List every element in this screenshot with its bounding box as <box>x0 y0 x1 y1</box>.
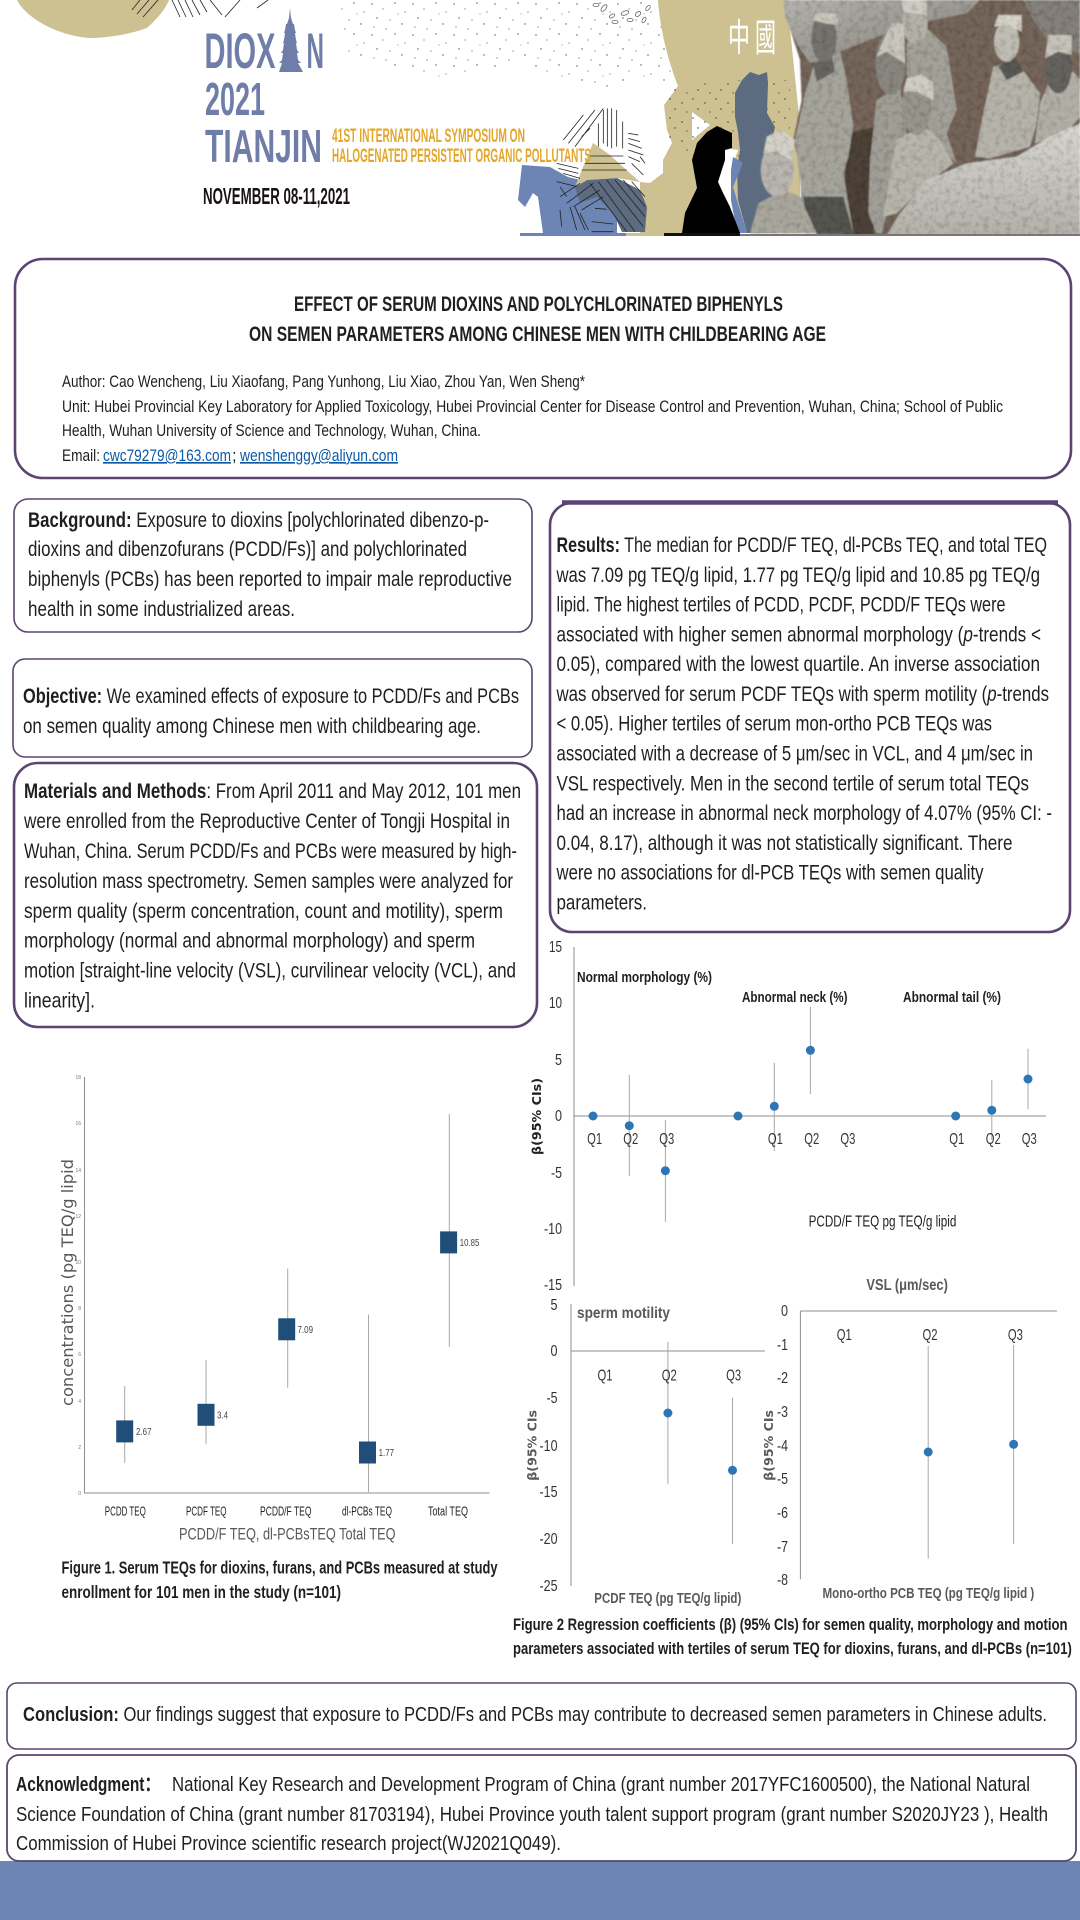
series headings: Abnormal tail (%) <box>903 989 1001 1006</box>
category labels <box>105 1504 468 1518</box>
blue silhouette strip <box>731 157 747 233</box>
y axis title: β(95% CIs) <box>530 1078 544 1155</box>
panel: materials and methods: sperm quality (sperm concentration, count and motility), sperm <box>24 900 503 923</box>
header banner: N <box>306 23 324 79</box>
y ticks <box>540 1297 558 1595</box>
title: EFFECT OF SERUM DIOXINS AND POLYCHLORINATED BIPHENYLS <box>294 293 783 316</box>
value labels: 7.09 <box>298 1325 313 1336</box>
whiskers <box>629 1007 1028 1222</box>
foreground rock <box>887 123 1080 235</box>
panel: title and authors <box>15 259 1071 478</box>
panel: materials and methods: motion [straight-line velocity (VSL), curvilinear velocity (VCL), and <box>24 960 516 982</box>
date: NOVEMBER 08-11,2021 <box>203 183 350 209</box>
y axis ticks: 12 <box>75 1214 81 1220</box>
icon: pagoda <box>279 8 303 72</box>
series headings: Normal morphology (%) <box>577 969 712 986</box>
whiskers <box>668 1342 732 1544</box>
icon: horse with hatch <box>518 108 647 233</box>
panel: background: health in some industrialized areas. <box>28 598 295 621</box>
panel: materials and methods: morphology (normal and abnormal morphology) and sperm <box>24 930 475 952</box>
photo: terracotta warriors <box>750 0 1080 235</box>
y ticks: -5 <box>777 1471 788 1488</box>
y ticks: -15 <box>540 1484 558 1501</box>
points <box>924 1440 1018 1456</box>
y ticks: 15 <box>549 939 562 956</box>
value labels <box>136 1238 480 1459</box>
panel: results: parameters. <box>556 892 647 914</box>
y axis title: concentrations (pg TEQ/g lipid <box>58 1159 77 1406</box>
y ticks: -10 <box>544 1221 562 1238</box>
whiskers <box>928 1345 1014 1559</box>
y axis ticks: 6 <box>78 1352 81 1358</box>
panel: materials and methods: resolution mass spectrometry. Semen samples were analyzed for <box>24 870 513 893</box>
y ticks: 0 <box>550 1343 558 1360</box>
y ticks <box>544 939 562 1294</box>
beige backdrop shape <box>640 0 800 233</box>
tertile labels: Q2 <box>986 1131 1001 1148</box>
chart: figure 1 serum TEQs <box>58 1075 490 1543</box>
top left hatch marks <box>132 0 268 17</box>
y ticks: -4 <box>777 1438 788 1455</box>
panel: materials and methods: Materials and Methods: From April 2011 and May 2012, 101 men <box>24 780 521 803</box>
decorative beige blob top left <box>17 0 169 38</box>
panel: background: dioxins and dibenzofurans (PCDD/Fs)] and polychlorinated <box>28 538 467 561</box>
authors and affiliation: Email: <box>62 447 100 465</box>
series headings <box>577 969 1001 1006</box>
tertile labels: Q1 <box>837 1327 852 1344</box>
points <box>663 1408 737 1475</box>
tertile labels: Q2 <box>623 1131 638 1148</box>
panel: conclusion <box>7 1683 1076 1749</box>
small outlined ovals <box>593 3 651 24</box>
symposium subtitle: 41ST INTERNATIONAL SYMPOSIUM ON <box>332 125 525 147</box>
panel: background <box>14 499 532 632</box>
y axis ticks: 2 <box>78 1445 81 1451</box>
y ticks: -3 <box>777 1404 788 1421</box>
value labels: 2.67 <box>136 1427 152 1438</box>
y axis ticks: 18 <box>75 1075 81 1081</box>
authors and affiliation: wenshenggy@aliyun.com <box>239 447 398 465</box>
chart: VSL regression <box>762 1277 1057 1602</box>
category labels: PCDD/F TEQ <box>260 1504 312 1518</box>
figure 1 caption <box>62 1558 498 1602</box>
panel: background: Background: Exposure to dioxins [polychlorinated dibenzo-p- <box>28 509 489 532</box>
y ticks: 0 <box>781 1303 788 1320</box>
stippled dot field <box>337 0 676 90</box>
panel: acknowledgment: Acknowledgment： <box>16 1773 160 1796</box>
city TIANJIN: TIANJIN <box>205 120 322 172</box>
y axis ticks: 16 <box>75 1121 81 1127</box>
y ticks: -7 <box>777 1539 788 1556</box>
panel: results: was observed for serum PCDF TEQs with sperm motility (p-trends <box>556 683 1049 706</box>
title: ON SEMEN PARAMETERS AMONG CHINESE MEN WITH CHILDBEARING AGE <box>249 323 826 346</box>
stippling on beige <box>668 80 790 160</box>
warrior behind <box>907 28 957 163</box>
black silhouette <box>682 126 740 233</box>
header banner <box>17 0 1080 236</box>
y ticks: -8 <box>777 1572 788 1589</box>
y axis ticks: 8 <box>78 1306 81 1312</box>
panel: acknowledgment <box>7 1755 1076 1861</box>
y axis title: β(95% CIs <box>526 1410 540 1481</box>
year 2021: 2021 <box>205 73 265 125</box>
authors and affiliation: Author: Cao Wencheng, Liu Xiaofang, Pang Yunhong, Liu Xiao, Zhou Yan, Wen Sheng* <box>62 373 585 391</box>
panel: background: biphenyls (PCBs) has been reported to impair male reproductive <box>28 568 512 591</box>
panel: results: were no associations for dl-PCB TEQs with semen quality <box>556 862 984 885</box>
bottom edge strip of banner <box>520 233 1080 236</box>
tertile labels <box>598 1368 741 1385</box>
y ticks: -25 <box>540 1578 558 1595</box>
footer band <box>0 1861 1080 1920</box>
tertile labels: Q3 <box>1022 1131 1037 1148</box>
category labels: Total TEQ <box>428 1504 468 1518</box>
tertile labels: Q2 <box>662 1368 677 1385</box>
y ticks: -5 <box>551 1165 562 1182</box>
y ticks: -1 <box>777 1337 788 1354</box>
y axis ticks <box>75 1075 81 1497</box>
warrior right <box>975 62 1040 158</box>
y ticks: -5 <box>546 1390 558 1407</box>
conference name DIOXIN: DIOX <box>204 23 276 79</box>
y ticks <box>777 1303 788 1589</box>
panel: materials and methods <box>14 763 537 1027</box>
tertile labels: Q2 <box>922 1327 938 1344</box>
authors and affiliation <box>62 373 1003 465</box>
y axis ticks: 0 <box>78 1491 81 1497</box>
category labels: PCDF TEQ <box>186 1504 227 1518</box>
y axis title: β(95% CIs <box>762 1410 776 1481</box>
x axis title: PCDD/F TEQ pg TEQ/g lipid <box>809 1214 956 1231</box>
panel: materials and methods: linearity]. <box>24 990 95 1012</box>
value labels: 10.85 <box>460 1238 480 1249</box>
chart heading: VSL (μm/sec) <box>866 1277 948 1294</box>
authors and affiliation: cwc79279@163.com <box>103 447 231 465</box>
panel: materials and methods: were enrolled from the Reproductive Center of Tongji Hospital in <box>23 810 510 833</box>
tertile labels: Q3 <box>1008 1327 1023 1344</box>
y ticks: -10 <box>540 1438 558 1455</box>
x axis title: Mono-ortho PCB TEQ (pg TEQ/g lipid ) <box>822 1586 1034 1602</box>
tertile labels: Q3 <box>726 1368 741 1385</box>
tertile labels <box>587 1131 1037 1148</box>
category labels: PCDD TEQ <box>105 1504 146 1518</box>
y axis ticks: 4 <box>78 1399 81 1405</box>
panel: results <box>550 502 1070 932</box>
figure 1 caption: Figure 1. Serum TEQs for dioxins, furans, and PCBs measured at study <box>62 1558 498 1578</box>
y ticks: 5 <box>555 1052 562 1069</box>
panel: results: associated with higher semen abnormal morphology (p-trends < <box>556 623 1041 646</box>
points <box>588 1046 1032 1175</box>
symposium subtitle <box>332 125 591 167</box>
tertile labels: Q1 <box>598 1368 613 1385</box>
chart heading: sperm motility <box>577 1305 670 1322</box>
y axis ticks: 10 <box>75 1260 81 1266</box>
x axis title: PCDD/F TEQ, dl-PCBsTEQ Total TEQ <box>179 1524 396 1543</box>
y ticks: -15 <box>544 1277 562 1294</box>
symposium subtitle: HALOGENATED PERSISTENT ORGANIC POLLUTANTS <box>332 145 591 167</box>
chart: morphology regression <box>530 939 1046 1294</box>
markers <box>116 1231 457 1464</box>
warrior left standing <box>795 52 853 233</box>
category labels: dl-PCBs TEQ <box>342 1504 392 1518</box>
chinese seal characters: 國 <box>755 18 776 60</box>
tertile labels: Q3 <box>840 1131 855 1148</box>
chinese seal characters: 中 <box>728 18 750 60</box>
whiskers <box>125 1114 449 1492</box>
title <box>249 293 826 346</box>
x axis title: PCDF TEQ (pg TEQ/g lipid) <box>594 1591 741 1607</box>
panel: objective: on semen quality among Chinese men with childbearing age. <box>23 715 481 738</box>
chart: sperm motility regression <box>526 1297 765 1607</box>
panel: acknowledgment: Commission of Hubei Province scientific research project(WJ2021Q049). <box>16 1832 561 1855</box>
warrior far right <box>1035 72 1080 143</box>
foreground warrior <box>750 190 817 233</box>
y ticks: 10 <box>549 995 562 1012</box>
y ticks: -20 <box>540 1531 558 1548</box>
series headings: Abnormal neck (%) <box>742 989 848 1006</box>
tertile labels: Q3 <box>659 1131 674 1148</box>
tertile labels: Q1 <box>949 1131 964 1148</box>
tertile labels: Q1 <box>768 1131 783 1148</box>
panel: materials and methods: Wuhan, China. Serum PCDD/Fs and PCBs were measured by high- <box>24 840 517 863</box>
chinese seal characters <box>728 18 776 60</box>
value labels: 1.77 <box>379 1448 394 1459</box>
y axis ticks: 14 <box>75 1168 81 1174</box>
authors and affiliation: Health, Wuhan University of Science and Technology, Wuhan, China. <box>62 422 481 440</box>
panel: objective <box>13 659 532 757</box>
warrior front centre <box>883 125 953 217</box>
tertile labels: Q2 <box>804 1131 819 1148</box>
tertile labels: Q1 <box>587 1131 602 1148</box>
figure 2 caption <box>513 1615 1072 1658</box>
figure 1 caption: enrollment for 101 men in the study (n=101) <box>62 1582 341 1602</box>
y ticks: -2 <box>777 1370 788 1387</box>
panel: objective: Objective: We examined effects of exposure to PCDD/Fs and PCBs <box>23 685 519 708</box>
authors and affiliation: ; <box>232 447 237 465</box>
slate silhouette <box>735 72 775 233</box>
white strip <box>718 148 738 232</box>
warrior middle <box>868 87 907 233</box>
value labels: 3.4 <box>217 1410 228 1422</box>
white triangle <box>692 112 710 140</box>
y ticks: 0 <box>555 1108 562 1125</box>
tertile labels <box>837 1327 1023 1344</box>
y ticks: -6 <box>777 1505 788 1522</box>
y ticks: 5 <box>550 1297 558 1314</box>
